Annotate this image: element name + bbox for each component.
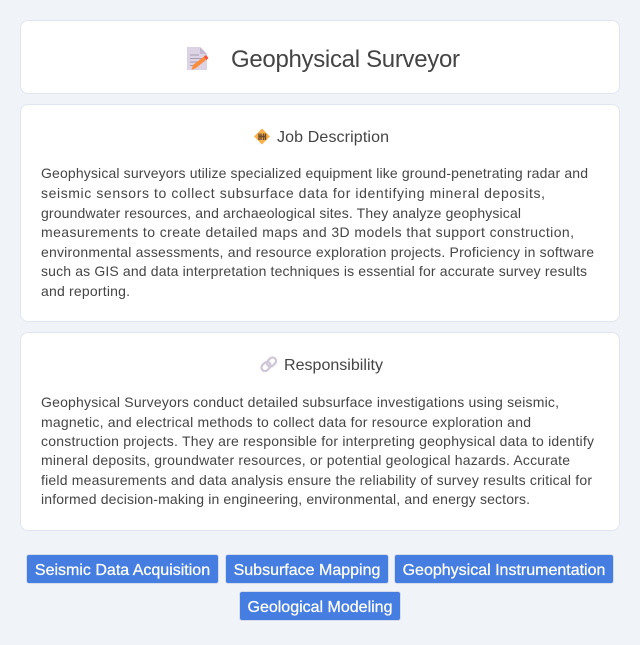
panel: job description card (20, 104, 620, 322)
text block: responsibility: construction projects. They are responsible for interpreting geophysical data to identify (41, 433, 594, 449)
text block: job description: seismic sensors to collect subsurface data for identifying mineral deposits, (41, 185, 545, 201)
text block: responsibility: informed decision-making in engineering, environmental, and energy sectors. (41, 491, 530, 507)
panel: title card (20, 20, 620, 94)
text block: responsibility: mineral deposits, groundwater resources, or potential geological hazards. Accurate (41, 452, 570, 468)
tag: seismic data acquisition: Seismic Data Acquisition (35, 562, 210, 579)
text block: job description: measurements to create detailed maps and 3D models that support construction, (41, 224, 574, 240)
text block: job description: Geophysical surveyors utilize specialized equipment like ground-penetrating radar and (41, 165, 588, 181)
text block: job description: such as GIS and data interpretation techniques is essential for accurate survey results (41, 263, 587, 279)
text block: responsibility: Geophysical Surveyors conduct detailed subsurface investigations using seismic, (41, 394, 559, 410)
text block: job description: groundwater resources, and archaeological sites. They analyze geophysical (41, 205, 521, 221)
tag: geophysical instrumentation: Geophysical Instrumentation (403, 562, 605, 579)
tag: geological modeling (239, 591, 401, 621)
panel: responsibility card (20, 332, 620, 531)
tag: geological modeling: Geological Modeling (248, 599, 392, 616)
tag: seismic data acquisition (26, 554, 219, 584)
text block: responsibility: magnetic, and electrical methods to collect data for resource exploration and (41, 414, 531, 430)
text block: job description: and reporting. (41, 283, 130, 299)
text block: job description: environmental assessments, and resource exploration projects. Proficiency in software (41, 244, 594, 260)
text block: responsibility: field measurements and data analysis ensure the reliability of survey results critical for (41, 472, 592, 488)
heading: responsibility: Responsibility (284, 357, 383, 374)
heading: job description: Job Description (277, 129, 389, 146)
tag: subsurface mapping: Subsurface Mapping (234, 562, 380, 579)
title: Geophysical Surveyor (231, 46, 460, 73)
tag: subsurface mapping (225, 554, 389, 584)
tag: geophysical instrumentation (394, 554, 614, 584)
